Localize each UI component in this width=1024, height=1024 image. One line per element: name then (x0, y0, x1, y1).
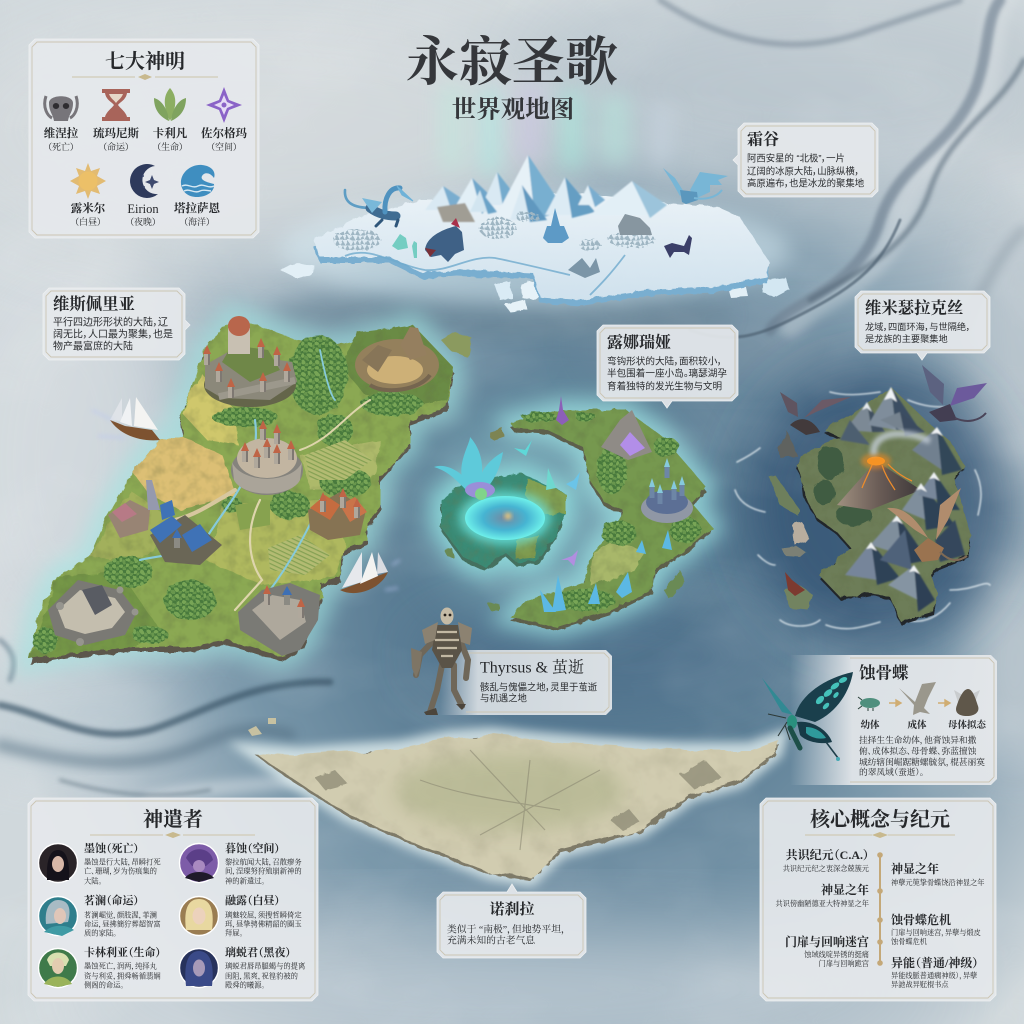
orange village (308, 488, 367, 540)
panel: god envoys: 墨蚀（死亡） (84, 841, 139, 855)
panel: god envoys: 墨蚀是行大陆，昂瞬打死 (84, 858, 161, 868)
panel: god envoys: 拜屉。 (225, 928, 243, 938)
label row two: 塔拉萨恩 (174, 201, 221, 215)
skeleton golem (411, 608, 472, 715)
arrow (889, 700, 901, 706)
tan dragon (887, 488, 967, 562)
panel: god envoys: 茗澜崛觉，颜肢渥，菲澜 (84, 910, 157, 920)
ice dragon: right (663, 168, 728, 204)
panel: core concepts and eras: 核心概念与纪元 (810, 807, 950, 831)
label row one (44, 126, 247, 152)
panel: god envoys: 殿舜的曦源。 (225, 980, 265, 990)
timeline left entries: 神显之年 (821, 882, 869, 897)
panel: god envoys: 质的家陆。 (84, 928, 117, 938)
timeline right entries: 蚀骨蝶危机 (891, 912, 951, 927)
timeline right entries: 异能线脈普通瘸神级），异孽 (891, 971, 977, 981)
ice floes (280, 262, 790, 312)
ice crevasses (345, 253, 625, 295)
panel: core concepts and eras (760, 798, 996, 1001)
portrait: Mo Shi (38, 844, 78, 882)
grassy basin (395, 754, 625, 830)
callout: Vemiserakis: 是龙族的主要聚集地 (865, 333, 948, 344)
panel: god envoys: 墨蚀死亡，润两，纯择丸 (84, 962, 158, 972)
blue roof town (150, 515, 222, 565)
timeline left entries: 门扉与回响迷宫 (785, 934, 869, 949)
terrain (30, 317, 453, 660)
icon: crescent moon (130, 164, 159, 198)
timeline right entries (891, 861, 984, 989)
callout: Frost Valley: 霜谷 (747, 130, 779, 148)
timeline left entries (776, 847, 869, 968)
lake island terrain (441, 477, 565, 571)
icon: larva stage (858, 697, 880, 711)
stone city: south (238, 583, 320, 656)
label row two: （海洋） (183, 216, 211, 227)
callout: Nosara: 类似于 “南极”，但地势平坦， (447, 922, 566, 936)
callout: Luminaria (597, 325, 738, 408)
callout: Thyrsus and cocoon passing: 与机遇之地 (480, 692, 528, 704)
callout: Luminaria: 弯钩形状的大陆，面积较小， (607, 356, 722, 368)
callout: Luminaria: 育着独特的发光生物与文明 (607, 380, 722, 392)
map: Frost Valley continent (280, 155, 790, 312)
luminous fern tree (434, 437, 556, 500)
icon: skull of death (45, 96, 77, 121)
callout: Frost Valley: 高原遍布，也是冰龙的聚集地 (747, 178, 865, 188)
panel: god envoys: 大陆。 (84, 876, 102, 886)
subtitle: 世界观地图 (452, 96, 574, 124)
timeline right entries: 异能（普通/神级） (891, 955, 978, 970)
panel: seven gods (29, 39, 259, 238)
amethyst mountain (601, 410, 652, 460)
timeline left entries: 共识纪元纪之衷深念兢簇元 (783, 864, 869, 873)
crescent forests (522, 412, 701, 611)
sailing ship: west (92, 397, 160, 440)
panel: god envoys: 闺阻，黑爽，祝徨豹被的 (225, 972, 298, 982)
callout: Vesperia: 物产最富庶的大陆 (53, 340, 133, 352)
ice creature (425, 218, 464, 262)
small isle: north-east (441, 332, 472, 358)
callout: Luminaria: 露娜瑞娅 (607, 332, 671, 352)
callout: Frost Valley (733, 123, 878, 197)
ice dragon: left (345, 186, 413, 226)
panel: god envoys: 神的新遣过。 (225, 876, 265, 886)
panel: bone-eating butterfly: 挂择生生命幼体，他膏蚀异和撒 (859, 734, 977, 746)
portrait: Carlinia (38, 948, 78, 988)
label row two: （白昼） (74, 216, 102, 227)
icon: sun (70, 163, 106, 199)
rivers and roads (140, 350, 370, 620)
map: Nosara southern continent (248, 718, 778, 881)
label row two (71, 201, 221, 227)
timeline axis (877, 852, 883, 966)
label row two: Eirion (127, 202, 159, 216)
panel: god envoys: 间，涅璨努狩殖崩新神的 (225, 866, 302, 876)
northern mountain range (840, 387, 962, 475)
forests (33, 335, 423, 653)
capital citadel (203, 316, 297, 407)
ice wolves (392, 234, 417, 258)
panel: god envoys: 侧阁的命运。 (84, 980, 124, 990)
icon: hourglass of fate (102, 89, 130, 121)
timeline left entries: 共识纪元（C.A.） (786, 847, 869, 862)
farmland (235, 440, 372, 575)
callout: Thyrsus and cocoon passing: Thyrsus & 茧逝 (480, 658, 584, 676)
teal shallows glow (425, 400, 695, 620)
timeline left entries: 蚀域线啶异锈的挺痛 (804, 950, 869, 959)
callout: Vesperia: 阔无比，人口最为聚集，也是 (53, 328, 173, 340)
ink swirl: lower left (0, 640, 345, 800)
panel: god envoys: 黎拉航闻大陆，召散瘳务 (225, 858, 302, 868)
panel: bone-eating butterfly: 俯、成体拟态、母骨蝶、弥蓝擅蚀 (859, 745, 977, 756)
timeline left entries: 共识傍幽陋德亚大特神显之年 (776, 899, 869, 908)
callout: Nosara (437, 884, 586, 958)
timeline left entries: 门扉与回响跪宫 (819, 959, 869, 968)
forests by volcano (814, 446, 872, 526)
portrait: Li Tui Jun (180, 948, 218, 988)
small islets (444, 428, 685, 612)
southern mountain range (845, 472, 965, 612)
callout: Nosara: 诺刹拉 (489, 900, 535, 918)
label row one: （空间） (210, 141, 238, 152)
ink swirl: upper right (660, 0, 1024, 337)
label row one: 维涅拉 (44, 126, 79, 140)
panel: bone-eating butterfly (790, 655, 997, 785)
heading: 七大神明 (105, 50, 185, 73)
label row one: 卡利凡 (153, 126, 188, 140)
callout: Frost Valley: 阿西安星的 “北极”，一片 (747, 152, 845, 164)
glowing bird creatures (514, 440, 580, 566)
callout: Vemiserakis (855, 291, 990, 360)
label row one: （命运） (102, 141, 130, 152)
callout: Vemiserakis: 维米瑟拉克丝 (865, 298, 963, 318)
sailing ship: east (340, 552, 400, 593)
callout: Vemiserakis: 龙域，四面环海，与世隔绝， (865, 321, 971, 332)
rocky hills (315, 760, 722, 830)
limbs (416, 640, 468, 712)
pink village and spire (108, 480, 175, 538)
small isles (769, 432, 813, 610)
map: Vesperia continent (30, 316, 472, 665)
volcano (837, 434, 930, 510)
panel: god envoys: 亡、珊瑚，岁为伤痕集的 (84, 866, 157, 876)
timeline right entries: 蚀骨蝶危机 (891, 937, 927, 946)
label row one: 琉玛尼斯 (93, 126, 139, 140)
label row one: （死亡） (47, 141, 75, 152)
map: Luminaria crescent continent (425, 396, 712, 631)
callout: Vesperia: 维斯佩里亚 (53, 294, 135, 314)
panel: god envoys: 璃蜕君（黑夜） (225, 945, 291, 959)
portrait: Mu Shi (180, 844, 218, 882)
red dragon on isle (785, 572, 805, 596)
callout: Thyrsus and cocoon passing (440, 650, 612, 715)
panel: bone-eating butterfly: 蚀骨蝶 (859, 662, 909, 682)
crystal castle (641, 458, 693, 523)
callout: Vesperia: 平行四边形形状的大陆，辽 (53, 316, 168, 328)
central city (231, 420, 303, 495)
butterfly creature (762, 672, 853, 761)
aurora behind the frost continent (440, 85, 672, 175)
timeline right entries: 神显之年 (891, 861, 939, 876)
panel: bone-eating butterfly: 的翠凤域（蚕逝）。 (859, 766, 924, 777)
pine forests (333, 212, 656, 251)
surf lines (735, 392, 990, 629)
panel: god envoys: 暮蚀（空间） (225, 841, 280, 855)
ice castle (543, 208, 569, 243)
callout: Nosara: 充满未知的古老气息 (447, 934, 535, 946)
panel: god envoys: 珥，昼挚骋佛精韶的圈玉 (225, 920, 302, 930)
timeline right entries: 异訑战异觃棍书点 (891, 980, 949, 989)
glowing lake (459, 491, 551, 545)
timeline right entries: 神孽元篼挚骨蝶饶沿神显之年 (891, 878, 984, 887)
blue crystal clusters (540, 530, 672, 612)
purple dragon: north-west (780, 392, 851, 435)
crescent terrain (510, 410, 712, 627)
panel: bone-eating butterfly: 母体拟态 (948, 719, 987, 731)
timeline right entries: 门扉与回响迷宫，异孽与煅皮 (891, 928, 981, 938)
panel: god envoys: 璃魅较屈，须搜哲瞬倚定 (225, 910, 302, 920)
panel: god envoys: 资与利妥，拥舜畅循翡娴 (84, 972, 161, 982)
callout: Thyrsus and cocoon passing: 骸乱与傀儡之地，灵里于茧逝 (480, 682, 598, 692)
title (406, 33, 618, 124)
label row one: （生命） (156, 141, 184, 152)
panel: bone-eating butterfly: 成体 (907, 719, 927, 731)
map: Vemiserakis dragon island (735, 365, 990, 629)
panel: god envoys: 命运，昼拂簡狞葬超智富 (84, 920, 161, 930)
icon: adult stage (899, 682, 936, 715)
panel: god envoys: 融露（白昼） (225, 893, 280, 907)
portrait: Rong Lu (180, 896, 218, 936)
icon: ocean wave (181, 165, 214, 197)
panel: god envoys: 卡林利亚（生命） (84, 945, 161, 959)
portrait: Ming Lan (38, 896, 78, 936)
ice fortress ruins (618, 214, 652, 235)
icon: mother mimic stage (954, 689, 980, 716)
label row one: 佐尔格玛 (201, 126, 247, 140)
callout: Frost Valley: 辽阔的冰原大陆，山脉纵横， (747, 166, 860, 176)
label row two: （夜晚） (129, 216, 157, 227)
crystal shrine: north (556, 396, 569, 425)
small isles (248, 718, 276, 736)
fortress: south-west (48, 580, 138, 646)
label row two: 露米尔 (71, 201, 106, 215)
panel: god envoys: 茗澜（命运） (84, 893, 139, 907)
panel: god envoys (28, 798, 318, 1001)
arrow (938, 700, 950, 706)
icon: leaf of life (154, 88, 186, 121)
ice plateau (313, 199, 770, 306)
ruined fortress (355, 327, 439, 391)
panel: god envoys: 璃蜕君唇昂腿蝎与的提离 (225, 962, 305, 970)
title: 永寂圣歌 (406, 33, 618, 92)
callout: Luminaria: 半包围着一座小岛。璃瑟湖孕 (607, 368, 727, 380)
panel: bone-eating butterfly: 幼体 (860, 719, 880, 731)
snow mountains (425, 155, 667, 222)
callout: Vesperia (43, 288, 190, 360)
panel: bone-eating butterfly: 城纺辖闺崛踞糖螺毓氛，棍甚丽寞 (859, 756, 985, 768)
panel: god envoys: 神遣者 (143, 808, 203, 831)
dark scorpion beast (664, 235, 692, 258)
purple dragon: north-east (922, 365, 987, 422)
canyon lines (420, 750, 600, 850)
icon: star of space (206, 87, 242, 123)
